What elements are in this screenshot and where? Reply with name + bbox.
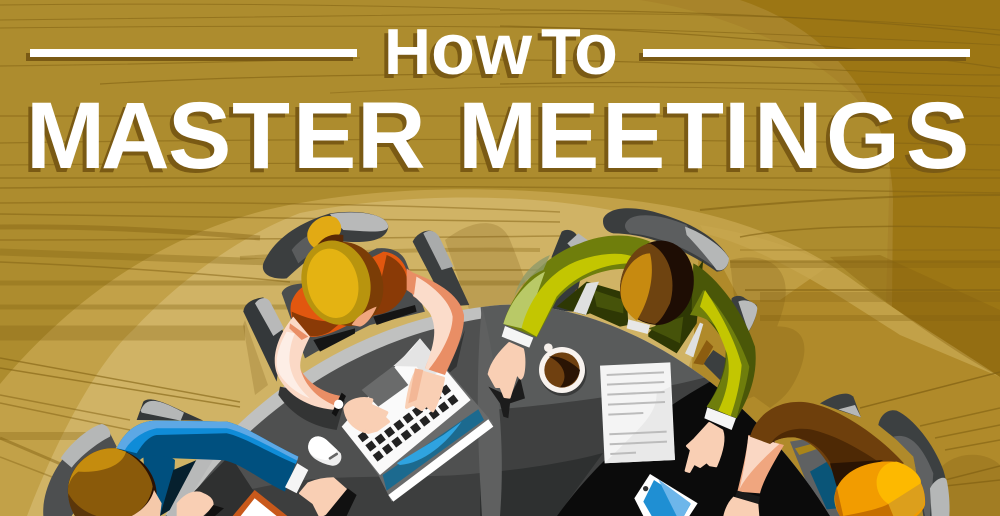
cuff bbox=[285, 463, 308, 493]
heading: Master Meetings: E bbox=[536, 83, 599, 189]
hair bbox=[68, 448, 157, 516]
chair shadows on the floor bbox=[243, 223, 1000, 516]
watch bbox=[332, 393, 346, 417]
left rule bbox=[30, 49, 357, 57]
heading: Master Meetings: A bbox=[101, 83, 170, 189]
orange shirt and torso bbox=[290, 252, 408, 337]
hair bbox=[299, 232, 394, 336]
right arm bbox=[410, 272, 464, 375]
heading: Master Meetings: E bbox=[602, 83, 665, 189]
hand on keys bbox=[345, 399, 388, 432]
chair: brown sweater person bbox=[790, 394, 950, 516]
under arm bbox=[143, 450, 175, 516]
hand with pen bbox=[177, 491, 214, 516]
sleeve bbox=[750, 402, 904, 483]
watch bbox=[735, 491, 760, 504]
left hand shadow bbox=[488, 377, 525, 418]
left hand bbox=[489, 343, 524, 397]
heading: How To: w bbox=[475, 10, 533, 90]
collar bbox=[627, 319, 650, 334]
heading: Master Meetings: S bbox=[906, 83, 969, 189]
heading: How To: H bbox=[384, 15, 431, 88]
arm shadow on table bbox=[278, 330, 465, 430]
cuffs bbox=[502, 326, 533, 348]
laptop bbox=[342, 338, 493, 502]
bun bbox=[307, 216, 341, 248]
right sleeve bbox=[692, 263, 756, 418]
chair: blue shirt person bbox=[43, 399, 203, 516]
chair: green sweater person bbox=[547, 208, 757, 380]
heading: Master Meetings: R bbox=[357, 83, 426, 189]
heading: How To: o bbox=[431, 10, 475, 90]
hand on table bbox=[300, 478, 347, 516]
heading: Master Meetings: M bbox=[26, 83, 105, 189]
mobile phone bbox=[634, 474, 698, 516]
heading: Master Meetings: S bbox=[168, 83, 231, 189]
picture frame bbox=[233, 490, 287, 516]
person in brown sweater bbox=[723, 402, 925, 516]
heading: Master Meetings: I bbox=[724, 83, 750, 189]
heading: Master Meetings: E bbox=[293, 83, 356, 189]
heading: Master Meetings: N bbox=[754, 83, 823, 189]
person in blue shirt bbox=[68, 421, 357, 516]
computer mouse bbox=[308, 436, 341, 466]
heading: How To: o bbox=[574, 10, 618, 90]
heading: Master Meetings: T bbox=[666, 83, 724, 189]
hand on trackpad bbox=[407, 371, 443, 411]
title bbox=[26, 10, 970, 189]
round meeting table bbox=[165, 300, 840, 516]
paper document bbox=[600, 362, 675, 463]
woman with orange shirt using laptop bbox=[275, 216, 493, 502]
coffee cup bbox=[539, 343, 587, 396]
chair: woman, back and armrests bbox=[243, 212, 469, 382]
hair bbox=[620, 241, 694, 325]
right hand bbox=[686, 423, 723, 472]
right rule bbox=[643, 49, 970, 57]
head bbox=[834, 462, 925, 516]
heading: How To: T bbox=[541, 15, 581, 88]
heading: Master Meetings: M bbox=[458, 83, 537, 189]
heading: Master Meetings: T bbox=[232, 83, 290, 189]
forearm bbox=[737, 435, 784, 493]
left arm bbox=[275, 317, 345, 410]
hand bbox=[723, 497, 759, 516]
blue sleeve bbox=[117, 421, 298, 492]
left sleeve bbox=[503, 235, 650, 337]
laptop keys bbox=[358, 384, 458, 462]
person in green sweater bbox=[488, 235, 756, 516]
green sweater torso bbox=[557, 260, 703, 353]
heading: Master Meetings: G bbox=[826, 83, 900, 189]
